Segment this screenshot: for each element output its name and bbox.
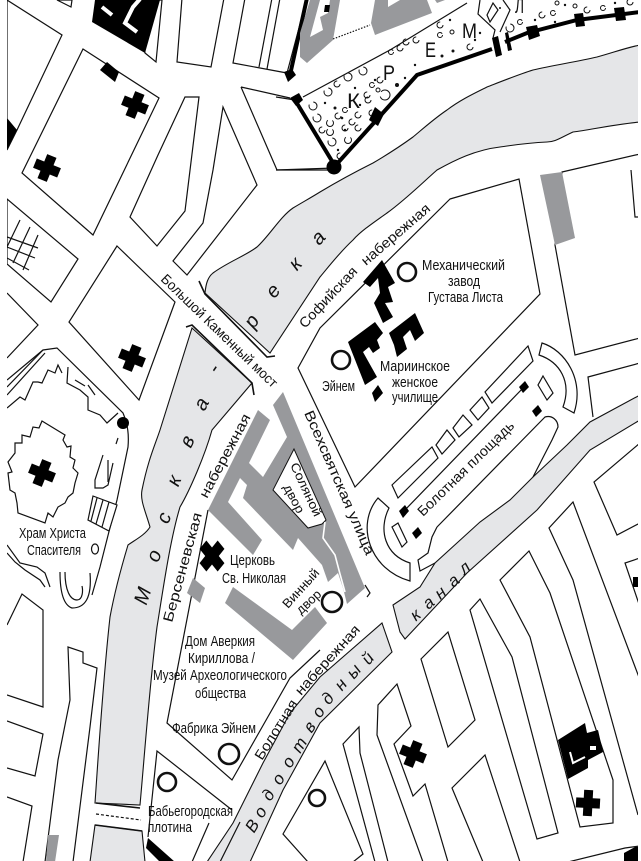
label: river name Moskva: М [130,585,156,607]
label: Cathedral of Christ the Saviour: Спасителя [27,543,81,559]
Bolotnaya square buildings [367,343,577,581]
label: Averky Kirillov house: общества [195,686,247,702]
label: Babyegorodskaya dam: Бабьегородская [148,804,233,820]
label: Averky Kirillov house: Дом Аверкия [185,634,255,650]
label: river name Moskva: с [152,509,176,526]
label: Einem factory: Фабрика Эйнем [172,721,256,737]
label: street names: набережная [358,200,433,268]
label: yards: двор [280,482,307,516]
label: street names: Софийская [295,263,360,331]
label: river name Moskva: р [239,311,264,333]
label: Vodootvodny canal: н [331,674,351,694]
label: Mechanical plant: Густава Листа [428,290,504,306]
label: canal: а [419,592,438,613]
labels: Kremlin [347,0,524,113]
river below dam [90,825,145,861]
label: river name Moskva: а [307,226,330,249]
label: Vodootvodny canal: д [258,786,279,804]
label: Mariinsky school: Мариинское [380,359,450,375]
label: street names: Большой Каменный мост [158,271,282,391]
label: Einem: Эйнем [322,379,355,395]
labels: Kremlin: К [347,90,361,113]
label: river name Moskva: - [203,359,225,378]
label: street names: Болотная [251,696,301,763]
label: river name Moskva: о [142,547,167,565]
Christ the Saviour building outline [8,421,78,523]
label: Mariinsky school: женское [392,375,438,391]
label: street names: Болотная площадь [414,417,517,519]
label: Vodootvodny canal: т [288,734,311,756]
label: street names [158,200,517,763]
label: canal: л [454,557,475,579]
label: Vodootvodny canal: о [278,753,299,771]
grey complex: Vinny and Solyanoy yards [46,392,365,861]
grey Kremlin buildings [300,0,575,245]
labels: Kremlin: Е [425,39,436,62]
label: Vodootvodny canal: о [250,803,271,821]
label: Mariinsky school [380,359,450,406]
label: Church of St Nicholas: Церковь [230,553,275,569]
labels: Kremlin: М [462,20,477,43]
label: river name Moskva: е [261,280,285,302]
label: Mechanical plant: завод [448,274,480,290]
label: Cathedral of Christ the Saviour [19,528,86,555]
label: Averky Kirillov house [153,634,287,702]
label: Vodootvodny canal: й [357,648,378,668]
Christ the Saviour garden [7,348,129,608]
label: yards: Винный [279,565,322,611]
label: canal [412,562,470,622]
label: street names: Всехсвятская улица [301,408,378,557]
label: Averky Kirillov house: Музей Археологического [153,668,287,684]
label: river name Moskva: к [162,471,187,489]
label: Mechanical plant: Механический [422,258,505,274]
label: Cathedral of Christ the Saviour: Храм Христа [19,526,87,542]
label: river name Moskva [130,226,330,607]
canal upper section [393,395,640,639]
label: canal: а [444,570,463,591]
label: river name Moskva: в [175,432,200,451]
label: canal: н [431,582,451,603]
dam [95,803,142,831]
icon: church crosses [25,88,601,817]
label: yards [280,463,322,617]
label: Vodootvodny canal: о [268,770,289,788]
label: Vodootvodny canal [241,648,378,836]
label: Mechanical plant [422,258,505,306]
label: canal: к [406,604,425,625]
label: Babyegorodskaya dam [148,805,232,832]
label: Mariinsky school: училище [392,390,438,406]
label: Vodootvodny canal: д [317,689,338,708]
label: yards: двор [293,586,324,617]
label: street names: набережная [291,621,363,698]
label: yards: Соляной [287,460,324,519]
label: Vodootvodny canal: в [299,718,320,736]
label: Vodootvodny canal: В [241,816,263,836]
label: Vodootvodny canal: о [308,703,329,721]
Vodootvodny canal [207,623,392,861]
label: Church of St Nicholas: Св. Николая [222,571,286,587]
label: river name Moskva: а [189,394,214,414]
river: Moskva upper reach [205,45,640,353]
label: street names: набережная [196,411,254,500]
label: river name Moskva: к [284,252,308,275]
river: Moskva lower reach [95,328,252,805]
Kremlin wall and stipple [276,0,640,174]
label: street names: Берсеневская [159,511,205,624]
Bolshoy Kamenny bridge lines [186,281,275,395]
icon: site circles [158,263,416,806]
label: Averky Kirillov house: Кириллова / [188,651,256,667]
label: Vodootvodny canal: ы [342,660,365,682]
label: Church of St Nicholas [222,555,286,583]
labels: Kremlin: Р [383,62,395,85]
label: Babyegorodskaya dam: плотина [148,820,193,836]
